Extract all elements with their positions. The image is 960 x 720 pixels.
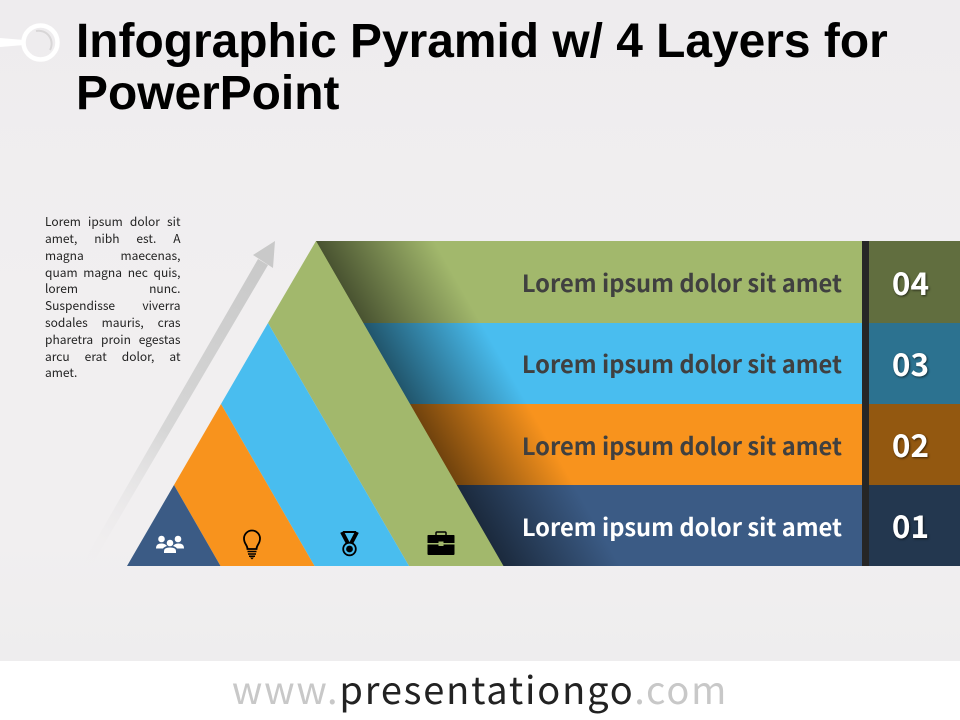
title — [76, 15, 888, 120]
footer: www.presentationgo.com — [232, 660, 728, 715]
icon: briefcase — [428, 532, 454, 555]
text block: description: pharetra proin egestas — [45, 331, 180, 348]
text block: description: Suspendisse viverra — [45, 297, 180, 314]
bar: layer 03 — [350, 323, 862, 404]
footer — [0, 661, 960, 720]
number 01: 01 — [892, 502, 929, 548]
title: PowerPoint — [76, 67, 339, 120]
number box 01 — [869, 485, 960, 566]
number 02: 02 — [892, 421, 929, 467]
bar: layer 01 — [450, 485, 862, 566]
number 03: 03 — [892, 340, 929, 386]
text block: description: Lorem ipsum dolor sit — [45, 213, 180, 230]
icon: light bulb — [244, 530, 260, 560]
text block: description: sodales mauris, cras — [45, 314, 180, 331]
icon: people — [156, 536, 184, 553]
pyramid layer: orange — [174, 404, 314, 566]
text block: description — [45, 213, 180, 381]
pyramid layer: navy — [127, 485, 220, 566]
text block: description: amet. — [45, 364, 77, 381]
number box 02 — [869, 404, 960, 485]
icon: medal — [342, 531, 357, 555]
text block: description: magna maecenas, — [45, 247, 180, 264]
label: layer 02: Lorem ipsum dolor sit amet — [522, 428, 842, 462]
text block: description: lorem nunc. — [45, 280, 180, 297]
number 04: 04 — [892, 259, 929, 305]
text block: description: quam magna nec quis, — [45, 264, 180, 281]
bar: layer 04 — [316, 241, 862, 323]
title: Infographic Pyramid w/ 4 Layers for — [76, 15, 888, 68]
pyramid layer: green — [268, 241, 504, 566]
label: layer 04: Lorem ipsum dolor sit amet — [522, 265, 842, 299]
arrow: rising — [80, 241, 275, 568]
divider — [862, 241, 869, 566]
number box 04 — [869, 241, 960, 323]
text block: description: arcu erat dolor, at — [45, 348, 180, 365]
pyramid layer: blue — [221, 323, 409, 566]
bar shadow — [316, 241, 620, 566]
bar: layer 02 — [400, 404, 862, 485]
number box 03 — [869, 323, 960, 404]
text block: description: amet, nibh est. A — [45, 230, 180, 247]
label: layer 01: Lorem ipsum dolor sit amet — [522, 509, 842, 543]
icon: magnifier ornament — [0, 23, 60, 62]
label: layer 03: Lorem ipsum dolor sit amet — [522, 346, 842, 380]
